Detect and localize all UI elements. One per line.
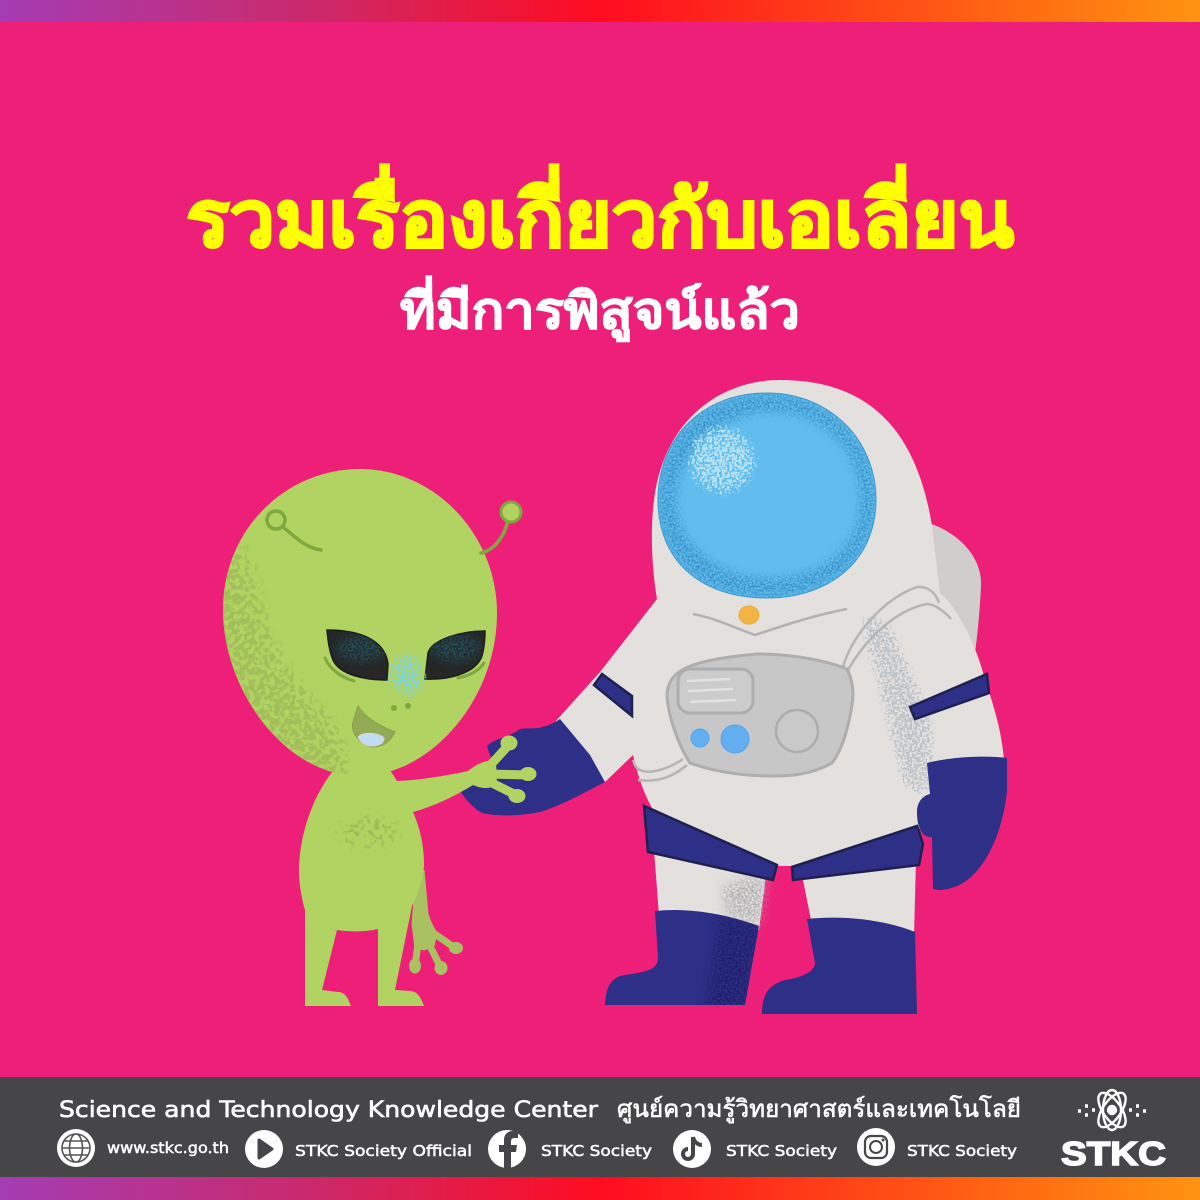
nose freckles xyxy=(389,651,425,699)
right arm band xyxy=(910,674,989,719)
tiktok text: STKC Society xyxy=(726,1142,837,1160)
left waist band xyxy=(644,806,777,880)
subtitle: ที่มีการพิสูจน์แล้ว xyxy=(400,276,800,342)
illustration: alien xyxy=(205,469,536,1006)
youtube text: STKC Society Official xyxy=(295,1142,472,1160)
icon: facebook xyxy=(488,1130,526,1168)
left arm band xyxy=(594,674,632,716)
footer english name: Science and Technology Knowledge Center xyxy=(59,1098,599,1123)
panel dial xyxy=(776,710,818,752)
nostrils xyxy=(391,703,411,711)
footer thai name: ศูนย์ความรู้วิทยาศาสตร์และเทคโนโลยี xyxy=(617,1095,1021,1124)
body shading xyxy=(324,818,412,846)
logo: atom mark xyxy=(1078,1088,1146,1132)
left boot xyxy=(605,910,759,1005)
alien eyes xyxy=(327,630,485,680)
left antenna xyxy=(267,511,321,550)
chest panel xyxy=(667,654,853,776)
icon: website xyxy=(57,1129,95,1167)
icon: tiktok xyxy=(673,1130,711,1168)
right leg xyxy=(802,860,916,936)
right boot xyxy=(762,918,917,1014)
collar button xyxy=(739,606,759,624)
collar line xyxy=(693,609,847,635)
left glove xyxy=(460,719,605,815)
alien lower arm xyxy=(410,870,462,974)
right waist band xyxy=(792,826,923,880)
illustration: astronaut xyxy=(460,380,1007,1014)
shoulder hoses xyxy=(843,587,951,670)
bottom gradient bar xyxy=(0,1177,1200,1200)
logo: STKC wordmark: STKC xyxy=(1061,1135,1166,1172)
alien hand xyxy=(486,736,536,802)
eye glints xyxy=(336,634,481,662)
alien head xyxy=(223,469,497,776)
panel small button xyxy=(691,729,709,747)
backpack xyxy=(925,522,981,660)
icon: play xyxy=(245,1130,283,1168)
right glove xyxy=(917,757,1007,890)
visor rim shading xyxy=(658,393,876,598)
icon: instagram xyxy=(857,1128,895,1166)
instagram text: STKC Society xyxy=(907,1142,1017,1160)
left boot shading xyxy=(705,915,760,1010)
left leg xyxy=(654,850,766,930)
head shading xyxy=(223,542,350,774)
mouth xyxy=(352,706,395,747)
facebook text: STKC Society xyxy=(541,1142,652,1160)
title: รวมเรื่องเกี่ยวกับเอเลี่ยน xyxy=(186,164,1014,263)
eye creases xyxy=(325,658,484,681)
panel large button xyxy=(721,725,749,753)
visor xyxy=(658,393,876,598)
alien body xyxy=(299,760,497,1006)
lower hoses xyxy=(633,759,687,781)
right antenna xyxy=(481,502,521,553)
website text: www.stkc.go.th xyxy=(107,1139,229,1157)
leg speckle xyxy=(722,872,768,925)
torso shading xyxy=(858,610,932,795)
panel screen xyxy=(678,669,753,713)
helmet and torso xyxy=(555,380,1004,866)
visor highlight xyxy=(688,426,756,494)
footer band xyxy=(0,1077,1200,1177)
top gradient bar xyxy=(0,0,1200,22)
teeth xyxy=(358,733,384,746)
